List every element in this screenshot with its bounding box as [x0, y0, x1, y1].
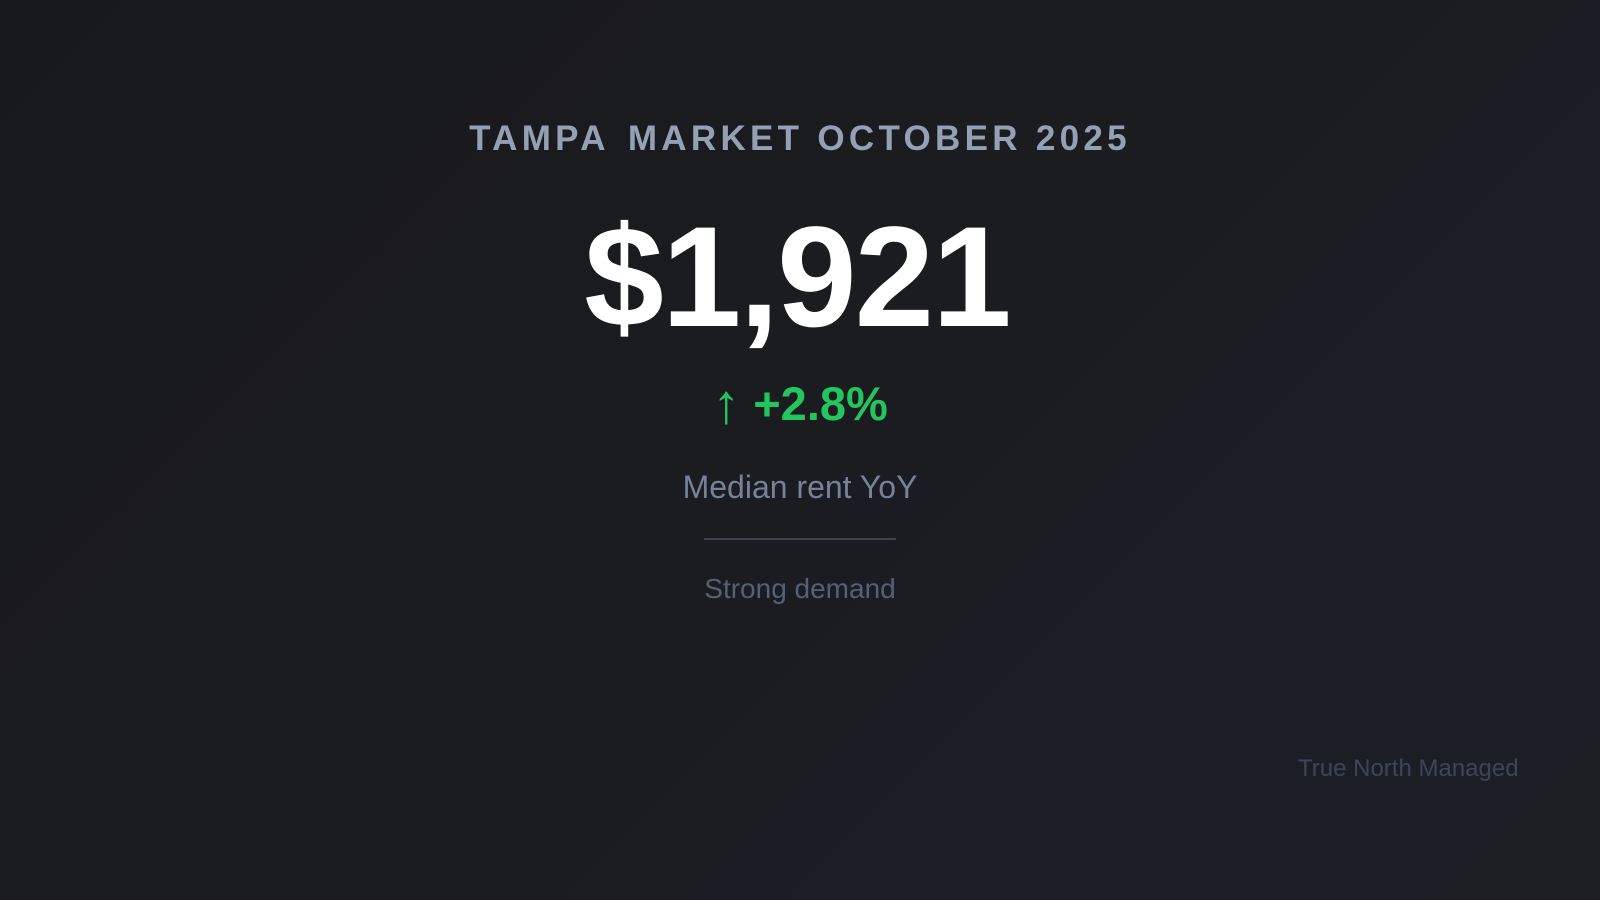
- title: TAMPA MARKET OCTOBER 2025: [469, 119, 1131, 158]
- subtitle: Median rent YoY: [683, 469, 917, 505]
- divider: [704, 538, 896, 540]
- note: Strong demand: [704, 573, 896, 604]
- change indicator: ↑ +2.8%: [712, 372, 888, 435]
- headline number: $1,921: [584, 198, 1010, 357]
- brand: True North Managed: [1298, 755, 1519, 782]
